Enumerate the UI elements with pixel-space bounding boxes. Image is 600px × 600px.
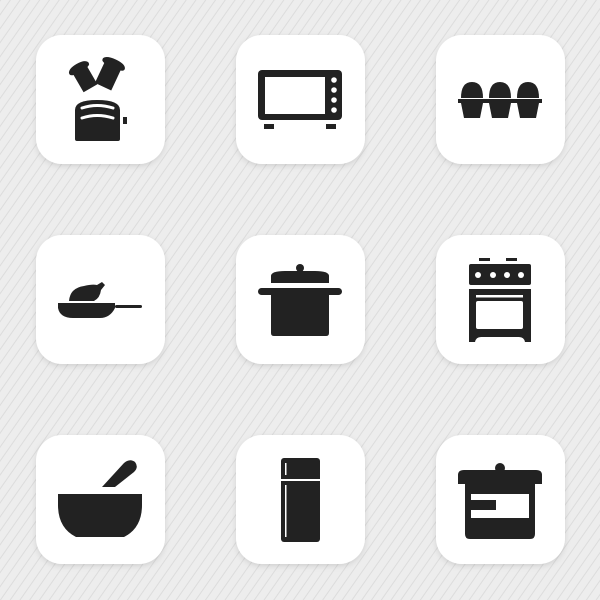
tiles <box>36 35 565 564</box>
icon: eggs <box>458 82 542 118</box>
icon: mortar and pestle <box>58 460 142 537</box>
icon: rice cooker <box>458 463 542 539</box>
icon: toaster <box>67 54 127 141</box>
icon: fridge <box>281 458 320 542</box>
icon: stove <box>469 258 531 342</box>
icon: pot <box>258 264 342 336</box>
icon: frying pan with chicken <box>58 282 142 318</box>
icon: microwave <box>258 70 342 129</box>
